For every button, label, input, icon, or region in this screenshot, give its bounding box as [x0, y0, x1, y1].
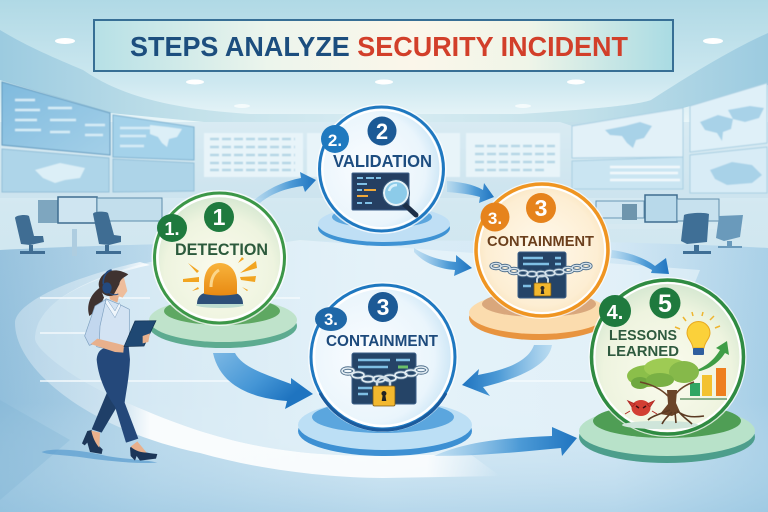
badge 4. [599, 295, 631, 327]
step 5: lessons learned: 4. [607, 302, 623, 324]
step 4: containment blue [298, 282, 472, 456]
number 1 [204, 202, 234, 232]
analyst: walking woman with tablet [42, 270, 157, 463]
heading: containment: CONTAINMENT [487, 233, 594, 250]
center wall screens [204, 133, 560, 177]
left desks and chairs [15, 197, 170, 256]
step 4: containment blue: 3. [324, 311, 338, 329]
right desks and chairs [596, 195, 745, 254]
arrow: validation to orange containment [414, 248, 472, 276]
arrows between steps [213, 172, 669, 456]
step 1: detection: 1 [213, 204, 226, 230]
face [110, 278, 127, 298]
heading: detection: DETECTION [175, 241, 268, 259]
arrow: validation to containment [447, 181, 494, 203]
number 5 [650, 288, 680, 318]
number 2 [368, 116, 396, 146]
step 3: containment orange: 3 [535, 195, 547, 221]
back shoe [82, 430, 103, 454]
ponytail [88, 288, 104, 316]
back leg [92, 389, 119, 433]
shadow [42, 450, 157, 463]
neck [108, 291, 119, 303]
circle [152, 190, 288, 326]
arrow: detection to validation [253, 172, 316, 203]
icon: screen with magnifier [352, 173, 416, 215]
blouse [96, 299, 129, 349]
icon: alarm siren [183, 257, 257, 308]
title banner [94, 20, 673, 71]
floor [0, 240, 768, 512]
arrow: detection to blue containment [213, 353, 313, 409]
step 2: validation [316, 104, 450, 246]
step 4: containment blue: 3 [377, 294, 389, 320]
number 3 [368, 292, 398, 322]
circle [588, 277, 746, 437]
circle [316, 104, 446, 234]
headset [103, 270, 112, 284]
step 3: containment orange [469, 181, 611, 340]
platform [149, 297, 297, 348]
arrow: to lessons learned [434, 427, 577, 456]
platform [318, 206, 450, 246]
step 2: validation: 2. [328, 131, 342, 150]
step 5: lessons learned [579, 277, 755, 463]
icon: tree [622, 358, 704, 429]
heading: lessons learned: LESSONS [609, 327, 677, 344]
arrow: orange containment to blue containment [462, 345, 552, 396]
circle [473, 181, 611, 319]
platform [298, 400, 472, 456]
step 3: containment orange: 3. [488, 209, 502, 228]
left wall screens [2, 82, 194, 192]
platform [469, 291, 609, 340]
hair [99, 270, 128, 296]
heading: containment: CONTAINMENT [326, 333, 438, 350]
front leg and hips [97, 346, 138, 443]
step 5: lessons learned: 5 [658, 290, 672, 318]
collar [105, 299, 121, 318]
badge 2. [321, 125, 349, 153]
forearm [91, 339, 124, 353]
number 3 [526, 193, 556, 223]
heading: validation: VALIDATION [333, 151, 432, 171]
badge 1. [157, 214, 187, 242]
badge 3. [480, 202, 510, 232]
step 2: validation: 2 [376, 119, 388, 144]
step 1: detection: 1. [164, 219, 180, 239]
icon: chained server [491, 252, 591, 298]
heading: lessons learned: LEARNED [607, 343, 679, 360]
step 1: detection [149, 190, 297, 348]
right wall screens [572, 83, 767, 193]
icon: light bulb [675, 312, 720, 355]
icon: chained server [342, 353, 427, 406]
tablet [124, 321, 156, 347]
badge 3. [315, 307, 347, 331]
back arm [85, 299, 106, 345]
arrow: containment to lessons [611, 250, 669, 274]
title text: STEPS ANALYZE SECURITY INCIDENT [130, 31, 628, 62]
icon: red bug [625, 400, 657, 416]
front shoe [130, 446, 157, 461]
platform [579, 404, 755, 463]
circle [308, 282, 458, 432]
icon: growth chart [680, 341, 729, 400]
